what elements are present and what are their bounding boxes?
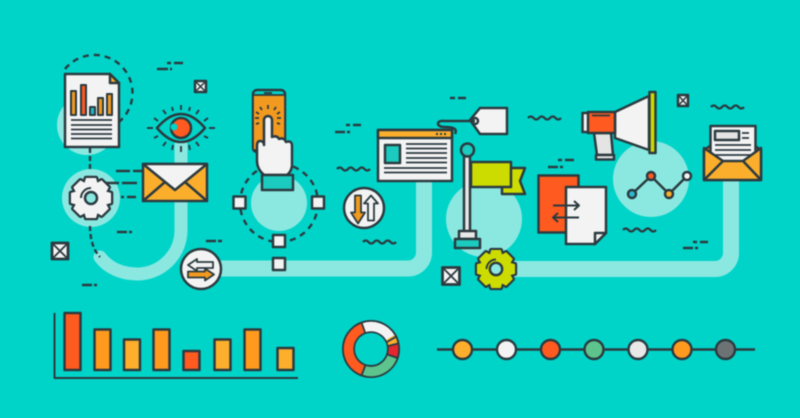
- icon: price tag with string: [438, 108, 507, 134]
- icon: swap arrows circle: [181, 249, 221, 289]
- squiggle marks: [337, 106, 744, 244]
- bar chart: [54, 313, 298, 378]
- icon: gear: [71, 178, 111, 218]
- icon: document exchange: [538, 176, 606, 244]
- icon: crossed box centre: [442, 268, 460, 284]
- handle squares on ring: [234, 196, 324, 270]
- icon: eye: [147, 105, 215, 152]
- icon: megaphone: [582, 92, 656, 160]
- timeline with dots: [437, 340, 755, 359]
- dashed arcs and connectors: [65, 55, 318, 257]
- icon: line chart: [628, 172, 691, 198]
- donut chart: [348, 322, 398, 376]
- icon: yellow gear: [477, 250, 515, 288]
- icon: report document: [65, 74, 119, 147]
- icon: crossed box right: [678, 95, 688, 106]
- icon: open envelope with letter: [704, 126, 761, 180]
- light connecting path: [100, 145, 731, 274]
- icon: crossed box left: [52, 243, 68, 259]
- icon: smartphone with touching hand: [253, 90, 293, 190]
- icon: up and down arrows circle: [344, 188, 384, 228]
- icon: envelope: [143, 164, 207, 201]
- icon: crossed box top: [195, 81, 206, 92]
- icon: flag on pole: [455, 144, 525, 248]
- icon: browser window: [378, 130, 452, 181]
- small dash marks: [82, 63, 708, 285]
- background circles: [57, 95, 689, 257]
